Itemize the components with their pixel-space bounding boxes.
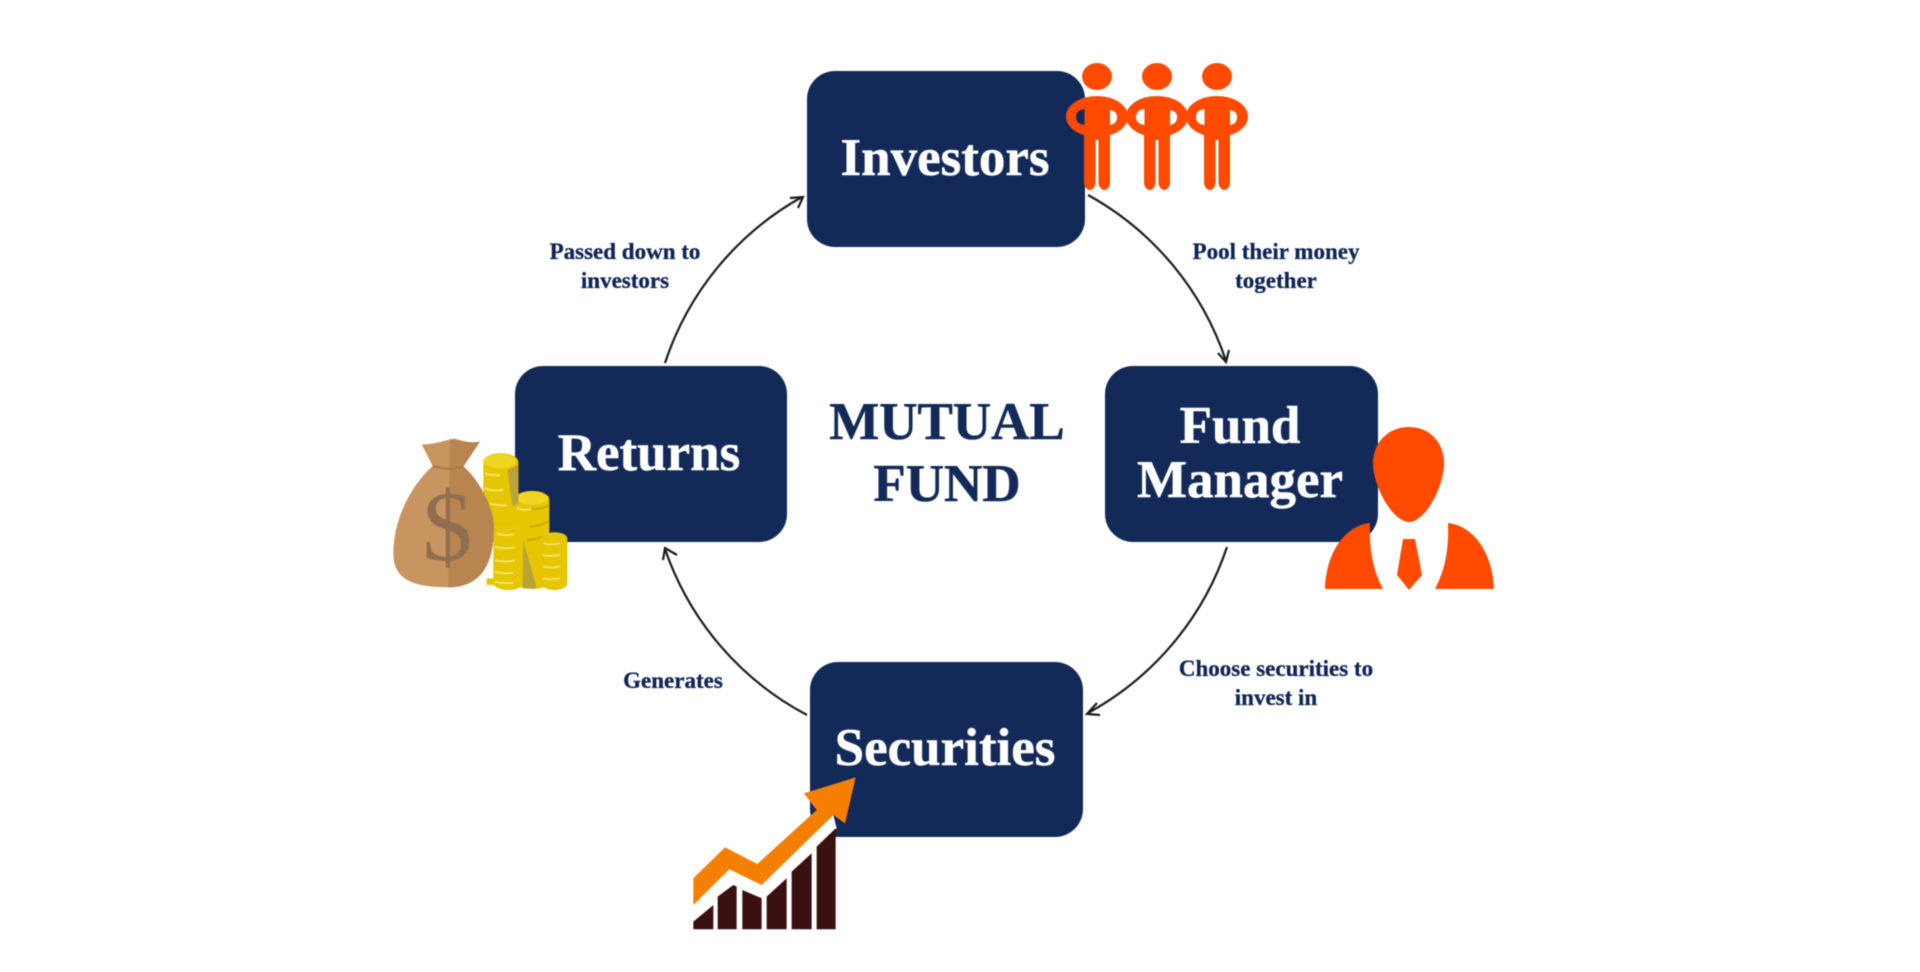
arrow: securities to returns <box>663 548 807 715</box>
center title: FUND <box>873 455 1021 513</box>
panel: investors: Investors <box>840 129 1050 187</box>
panel: fund manager <box>1105 366 1378 542</box>
label: pool their money <box>1193 239 1360 293</box>
label: choose securities: invest in <box>1235 685 1317 710</box>
icon: growth chart <box>693 777 856 929</box>
arrow: investors to fund manager <box>1088 195 1229 362</box>
panel: securities: Securities <box>835 719 1055 777</box>
arrow: returns to investors <box>665 197 803 363</box>
panel: returns: Returns <box>558 424 740 482</box>
panel: investors <box>807 71 1085 247</box>
label: pool their money: together <box>1235 268 1317 293</box>
coin stacks <box>483 453 567 590</box>
bag <box>393 439 494 587</box>
icon: fund manager person <box>1325 427 1494 590</box>
panel: fund manager: Manager <box>1137 451 1343 509</box>
icon: three investors <box>1066 63 1248 190</box>
label: passed down <box>550 239 700 293</box>
label: pool their money: Pool their money <box>1193 239 1360 264</box>
bag: $ <box>422 471 472 582</box>
label: choose securities: Choose securities to <box>1179 656 1373 681</box>
icon: money bag and coins <box>393 439 567 590</box>
panel: fund manager: Fund <box>1180 397 1300 455</box>
panel: securities <box>810 662 1083 837</box>
label: passed down: investors <box>581 268 669 293</box>
center title <box>829 393 1065 513</box>
label: generates: Generates <box>623 668 723 693</box>
center title: MUTUAL <box>829 393 1065 451</box>
panel: returns <box>515 366 787 542</box>
arrow: fund manager to securities <box>1087 547 1227 715</box>
label: passed down: Passed down to <box>550 239 700 264</box>
label: choose securities <box>1179 656 1373 710</box>
